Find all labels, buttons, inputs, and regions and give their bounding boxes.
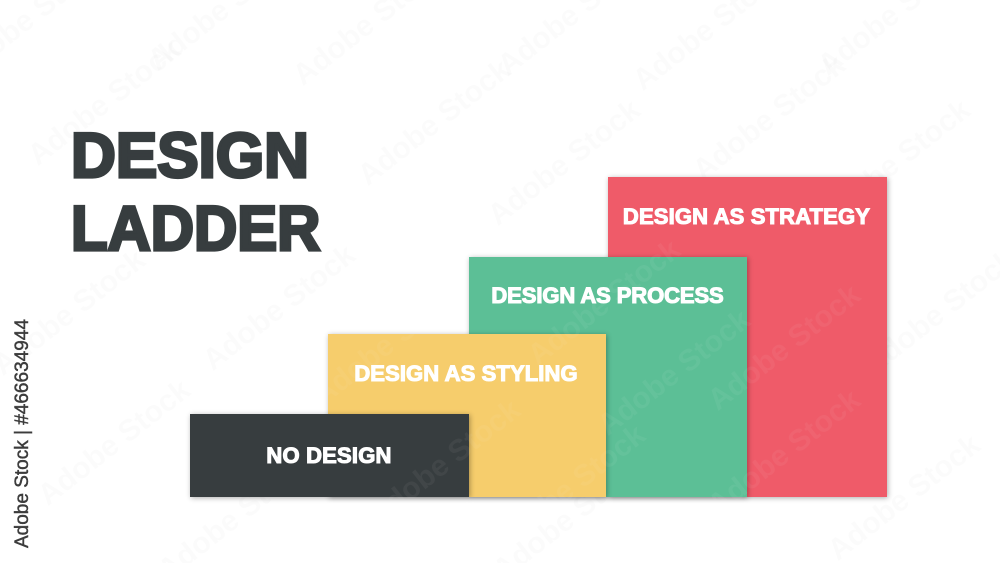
step: no design (190, 414, 469, 497)
label: design as strategy: DESIGN AS STRATEGY (623, 204, 870, 229)
title: LADDER (71, 194, 320, 264)
watermark on steps: Adobe Stock (487, 418, 652, 557)
watermark on background: Adobe Stock (822, 428, 987, 563)
title (71, 121, 322, 264)
watermark on background: Adobe Stock (482, 93, 647, 232)
watermark on steps: Adobe Stock (522, 233, 687, 372)
title: DESIGN (71, 121, 309, 191)
watermark on steps: Adobe Stock (702, 383, 867, 522)
watermark on background: Adobe Stock (687, 48, 852, 187)
step: design as process (469, 257, 747, 497)
watermark on steps: Adobe Stock (702, 278, 867, 417)
label: no design: NO DESIGN (266, 443, 392, 468)
label: design as process: DESIGN AS PROCESS (491, 283, 724, 308)
stock image id: Adobe Stock | #466634944 (12, 319, 33, 548)
step: design as styling (328, 334, 606, 497)
watermark on background: Adobe Stock (22, 33, 187, 172)
watermark on steps: Adobe Stock (362, 393, 527, 532)
watermark on background: Adobe Stock (812, 93, 977, 232)
watermark on steps: Adobe Stock (307, 273, 472, 412)
watermark on steps: Adobe Stock (592, 303, 757, 442)
label: design as styling: DESIGN AS STYLING (354, 361, 578, 386)
watermark on background: Adobe Stock (32, 373, 197, 512)
watermark on background: Adobe Stock (197, 238, 362, 377)
step: design as strategy (608, 177, 887, 497)
watermark on background: Adobe Stock (352, 53, 517, 192)
